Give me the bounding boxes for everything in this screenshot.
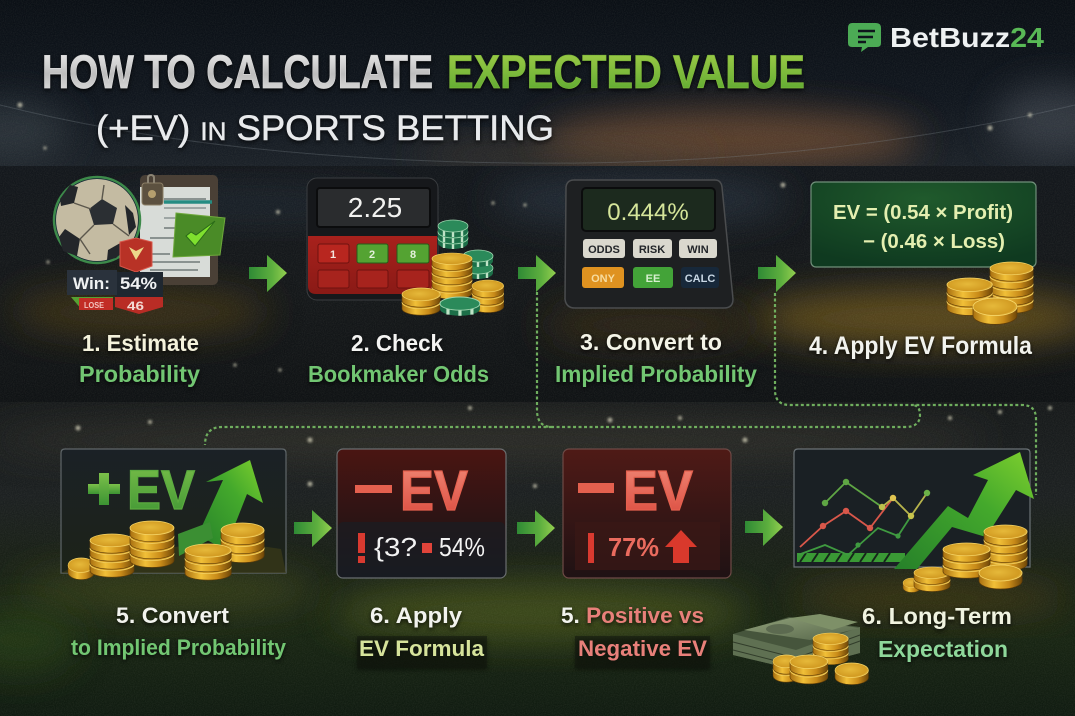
- connector: dashed path from step 2 to step 5: [205, 292, 920, 445]
- icon: big green arrow: [894, 452, 1034, 569]
- line chart: [798, 479, 930, 555]
- icon: odds terminal: 1: [330, 249, 336, 261]
- icon: calculator: CALC: [685, 273, 715, 285]
- label: step 5: to Implied Probability: [71, 635, 287, 660]
- icon: coins: [947, 262, 1033, 324]
- label: step 6: EV Formula: [359, 636, 485, 661]
- label: step 2: 2. Check: [351, 330, 443, 356]
- label: step 8: Expectation: [878, 636, 1008, 662]
- connector: dashed path from step 3 to step 8: [775, 293, 1036, 495]
- panel: +EV: EV: [127, 458, 195, 521]
- panel: formula: − (0.46 × Loss): [863, 231, 1005, 253]
- arrow 2: [518, 255, 556, 292]
- arrow 5: [517, 510, 555, 547]
- label: step 2: [308, 330, 489, 387]
- label: step 6: 6. Apply: [370, 603, 463, 628]
- step 1: estimate probability: [54, 175, 225, 387]
- label: step 3: Implied Probability: [555, 361, 757, 387]
- panel: -EV formula: [337, 449, 506, 578]
- panel: formula: EV = (0.54 × Profit): [833, 202, 1013, 224]
- title: [42, 45, 805, 98]
- step 4: apply EV formula: [809, 182, 1036, 360]
- label: step 7: [561, 603, 710, 668]
- arrow 1: [249, 255, 287, 292]
- step 3: convert to implied probability: [555, 180, 757, 387]
- title: EXPECTED VALUE: [447, 45, 805, 98]
- panel: chart: [794, 449, 1034, 592]
- icon: green arrow: [198, 460, 263, 550]
- icon: clipboard: [140, 175, 218, 285]
- label: step 3: 3. Convert to: [580, 329, 722, 355]
- label: step 2: Bookmaker Odds: [308, 361, 489, 387]
- arrow 3: [758, 255, 796, 292]
- icon: green check tile: [173, 213, 225, 257]
- icon: win shield: LOSE: [84, 301, 105, 310]
- label: step 1: Probability: [79, 361, 200, 387]
- step 8: long-term: [733, 449, 1034, 685]
- icon: calculator: RISK: [639, 244, 665, 256]
- panel: -EV 77%: EV: [623, 459, 693, 523]
- icon: coins: [903, 525, 1027, 592]
- icon: logo mark: [848, 23, 881, 52]
- step 2: check bookmaker odds: [307, 178, 504, 387]
- label: step 3: [555, 329, 757, 387]
- step 6: -EV panel: [337, 449, 506, 668]
- icon: calculator: ODDS: [588, 244, 620, 256]
- panel: +EV: [61, 449, 286, 580]
- icon: red up arrow: [665, 530, 697, 563]
- arrow 4: [294, 510, 332, 547]
- label: step 7: 5. Positive vs: [561, 603, 704, 628]
- icon: calculator: 0.444%: [607, 199, 689, 226]
- panel: -EV 77%: [563, 449, 731, 578]
- label: step 6: [357, 603, 487, 668]
- logo wordmark: BetBuzz 24: [890, 22, 1044, 53]
- panel: -EV formula: EV: [400, 459, 468, 523]
- title: HOW TO CALCULATE: [42, 45, 433, 98]
- icon: win shield: Win:: [73, 274, 110, 293]
- label: step 4: 4. Apply EV Formula: [809, 332, 1033, 360]
- icon: odds terminal: 2.25: [348, 192, 402, 223]
- icon: calculator: ONY: [591, 273, 616, 285]
- icon: win shield: [67, 238, 163, 314]
- panel: -EV 77%: 77%: [608, 532, 659, 562]
- label: step 1: [79, 330, 200, 387]
- icon: soccer ball: [54, 177, 140, 263]
- icon: calculator: [565, 180, 733, 308]
- label: step 1: 1. Estimate: [82, 330, 199, 356]
- panel: formula: [811, 182, 1036, 267]
- icon: calculator: EE: [646, 273, 660, 285]
- icon: chips and coins: [402, 220, 504, 316]
- panel: -EV formula: {3?: [374, 532, 417, 562]
- label: step 7: Negative EV: [578, 636, 707, 661]
- label: step 5: 5. Convert: [116, 603, 230, 628]
- step 7: positive vs negative: [561, 449, 731, 668]
- icon: odds terminal: 8: [410, 249, 416, 261]
- icon: win shield: 54%: [120, 274, 157, 293]
- logo: BetBuzz24: [848, 22, 1044, 53]
- step 5: +EV: [61, 449, 287, 660]
- panel: -EV formula: 54%: [439, 532, 485, 562]
- label: step 8: 6. Long-Term: [862, 603, 1012, 629]
- icon: cash and coins: [733, 614, 868, 685]
- icon: odds terminal: [307, 178, 438, 300]
- icon: win shield: 46: [127, 299, 144, 313]
- subtitle: (+EV) IN SPORTS BETTING: [96, 109, 554, 148]
- label: step 5: [71, 603, 287, 660]
- icon: coin stacks: [68, 521, 264, 580]
- arrow 6: [745, 509, 783, 546]
- icon: calculator: WIN: [687, 244, 709, 256]
- icon: odds terminal: 2: [369, 249, 375, 261]
- label: step 8: [862, 603, 1012, 662]
